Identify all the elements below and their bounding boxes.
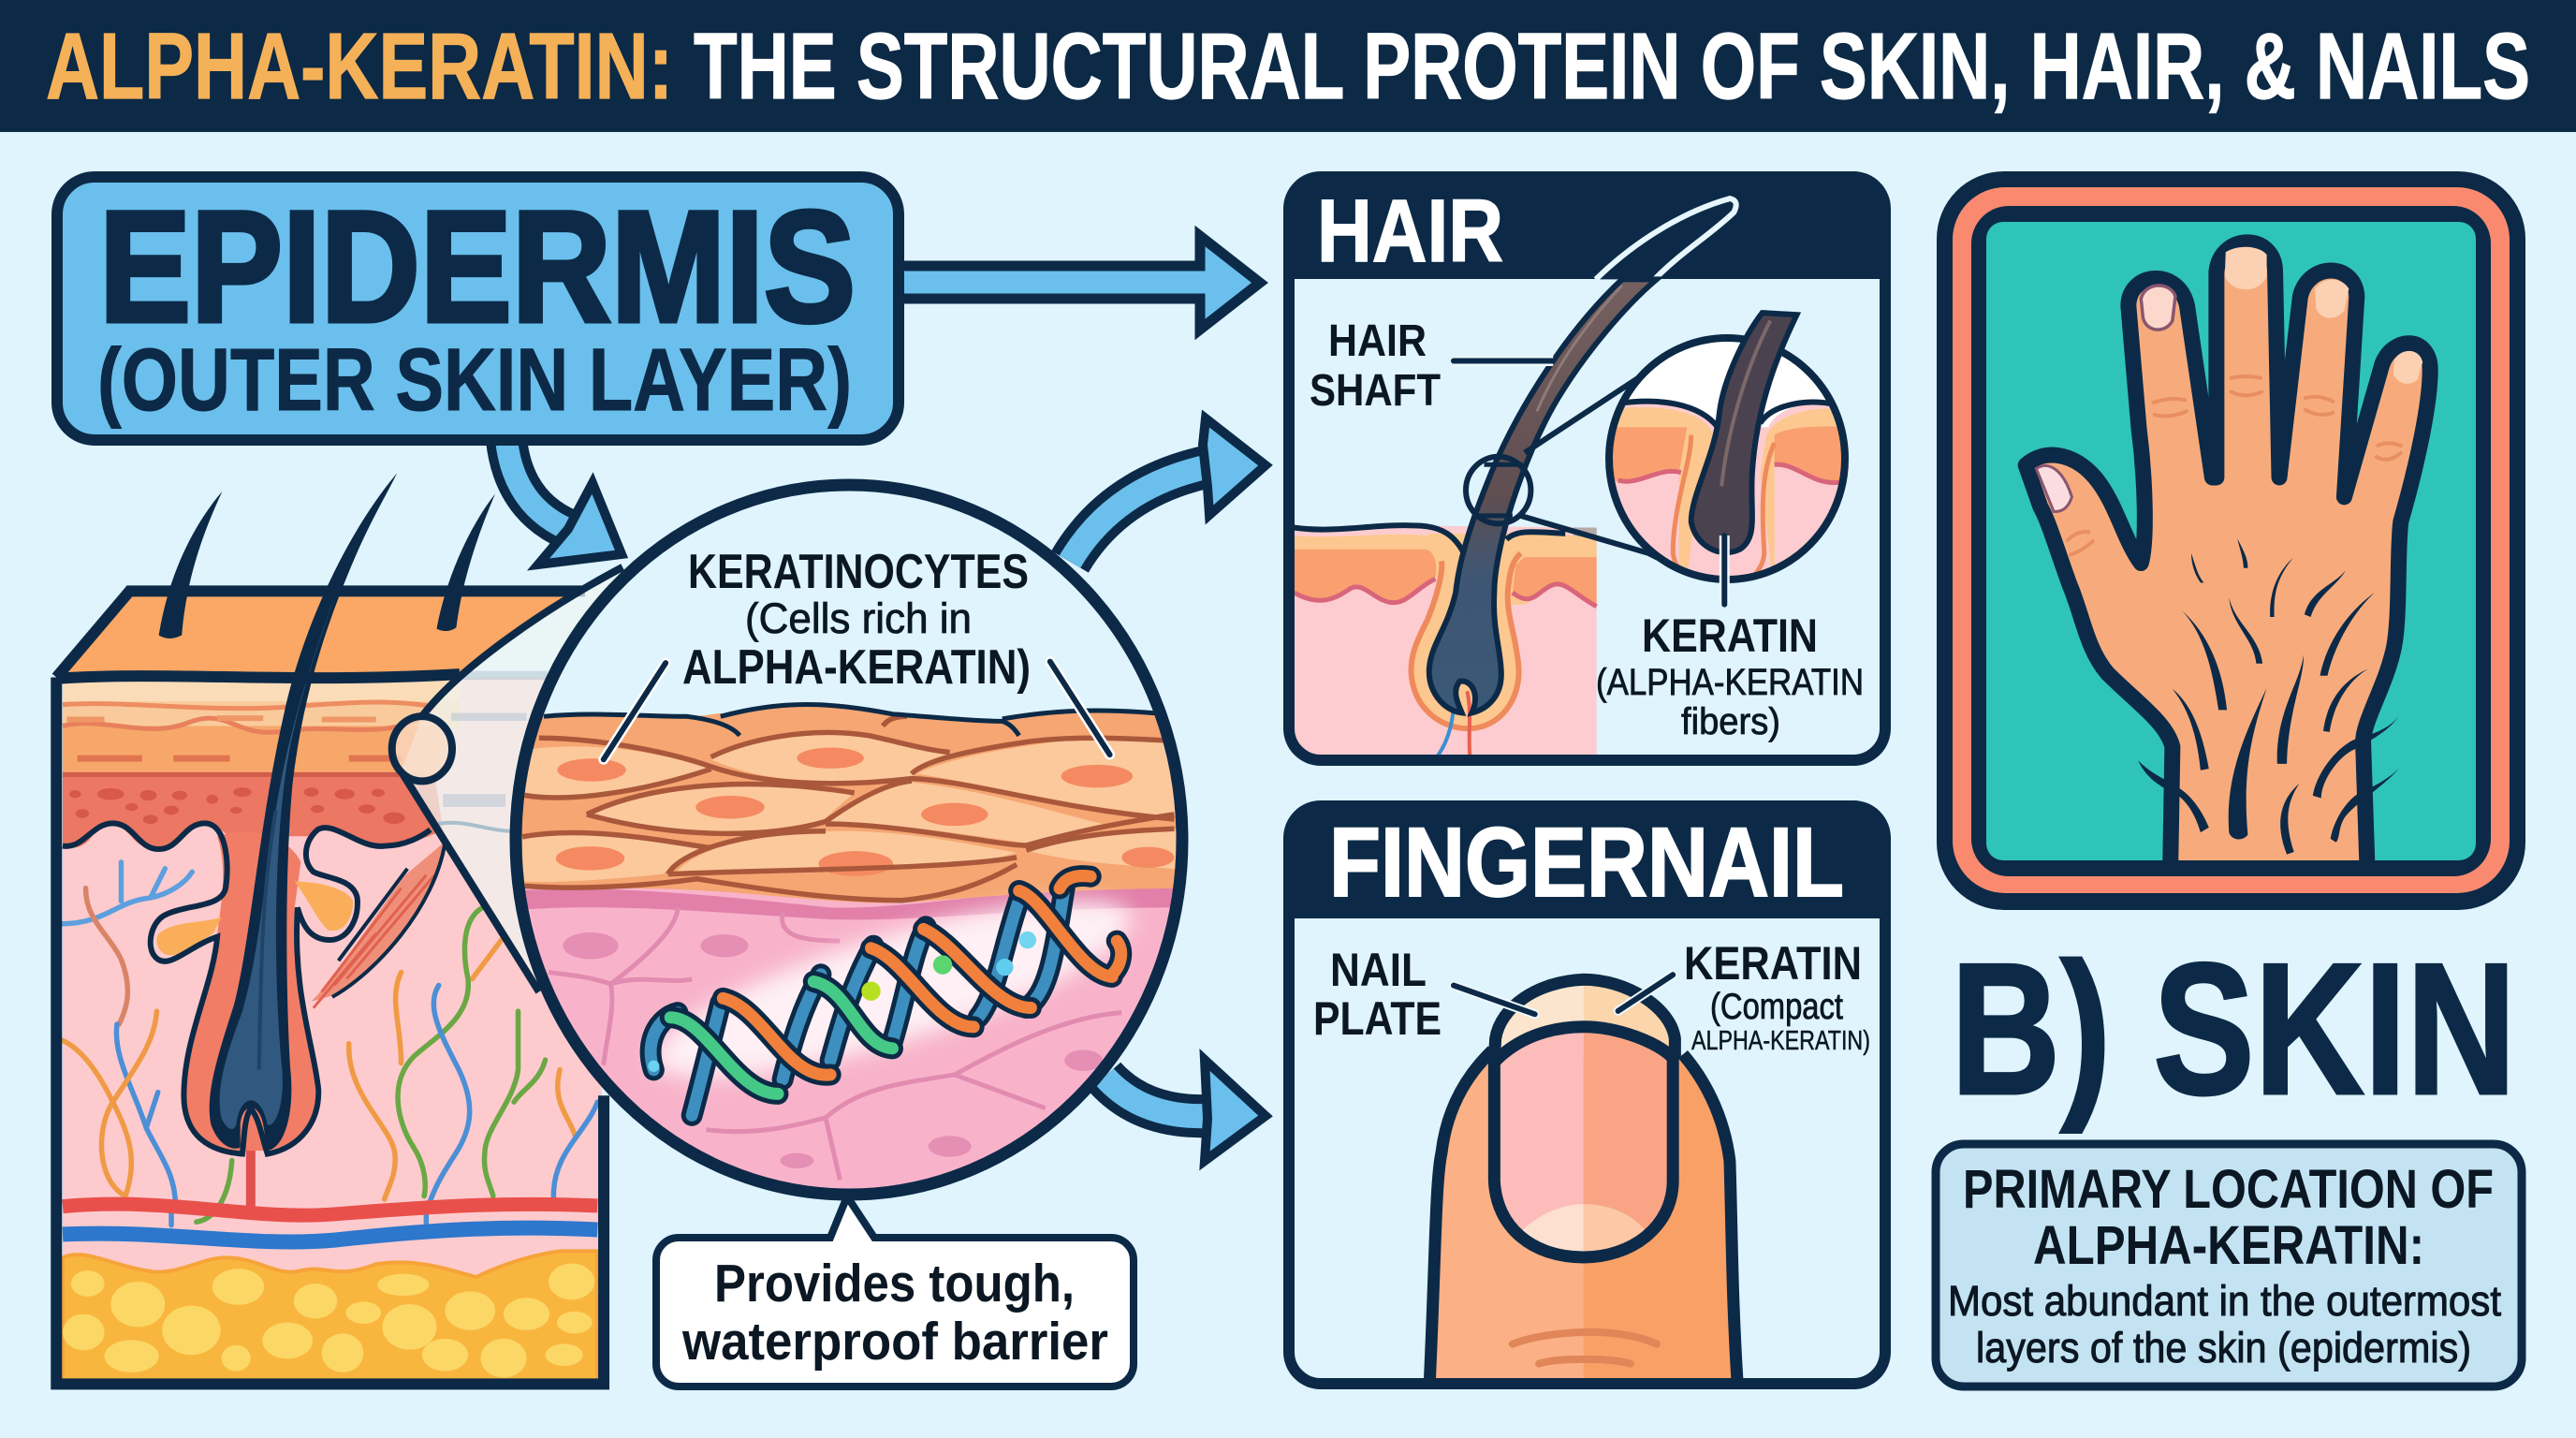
- small surface hairs: [159, 492, 495, 638]
- primary location info box: layers of the skin (epidermis): [1976, 1324, 2471, 1372]
- panel: hair: [1289, 177, 1885, 760]
- hair shaft label: HAIR: [1328, 316, 1427, 366]
- arrector muscle: [312, 843, 445, 1008]
- arrow: epidermis down to keratinocytes: [506, 440, 622, 565]
- callout: barrier: Provides tough,: [714, 1254, 1075, 1313]
- hand: [2026, 242, 2430, 869]
- epidermis label box: EPIDERMIS: [99, 178, 856, 355]
- blood vessels and nerves: [63, 862, 597, 1225]
- knuckle creases: [2068, 376, 2401, 555]
- primary location info box: ALPHA-KERATIN:: [2033, 1215, 2424, 1276]
- alpha-helix protein: [648, 876, 1121, 1115]
- keratinocytes label: KERATINOCYTES: [688, 545, 1029, 599]
- main hair: [210, 473, 397, 1151]
- nail plate label: NAIL: [1330, 944, 1427, 996]
- panel: fingernail: FINGERNAIL: [1329, 808, 1844, 917]
- nail free edge: [1494, 979, 1675, 1058]
- hair keratin label: (ALPHA-KERATIN: [1596, 662, 1864, 703]
- hair shaft label: [1310, 316, 1441, 416]
- callout: barrier: [656, 1196, 1134, 1387]
- pink dermis layer: [525, 888, 1173, 1189]
- primary location info box: [1936, 1144, 2522, 1387]
- title banner: [0, 0, 2576, 132]
- nail keratin label: (Compact: [1710, 987, 1843, 1027]
- hand hairs: [2138, 538, 2399, 855]
- nail plate label: [1313, 944, 1442, 1045]
- primary location info box: Most abundant in the outermost: [1948, 1277, 2501, 1325]
- follicle and glands: [63, 823, 431, 1154]
- fingernail header: [1289, 806, 1885, 918]
- stratified keratinocyte cells: [515, 704, 1179, 903]
- blue vein: [63, 1228, 597, 1241]
- subcutaneous fat: [63, 1251, 597, 1381]
- keratinocytes label: ALPHA-KERATIN): [682, 640, 1031, 695]
- panel: fingernail: [1289, 806, 1885, 1389]
- hair leader lines: [1454, 361, 1724, 605]
- nail keratin label: [1684, 937, 1870, 1056]
- red artery: [63, 1204, 597, 1215]
- epidermis strata: [63, 681, 460, 849]
- hair keratin label: KERATIN: [1642, 609, 1818, 662]
- hair shaft label: SHAFT: [1310, 366, 1441, 416]
- epidermis label box: (OUTER SKIN LAYER): [97, 330, 852, 430]
- block outline: [56, 591, 604, 1384]
- keratinocytes label: [682, 545, 1031, 695]
- arrow: keratinocytes to fingernail: [1105, 1060, 1266, 1161]
- hair tip over header: [1596, 198, 1736, 279]
- skin section with follicle: [1295, 525, 1597, 756]
- nail leader lines: [1454, 975, 1673, 1014]
- nail plate: [1494, 1027, 1673, 1257]
- top surface of skin block: [63, 591, 585, 678]
- title banner: ALPHA-KERATIN:: [46, 14, 673, 119]
- panel: hair: HAIR: [1317, 182, 1503, 281]
- nail plate label: PLATE: [1313, 992, 1442, 1045]
- cell leader lines: [604, 662, 1110, 759]
- hair keratin label: fibers): [1681, 701, 1780, 742]
- magnifier wedge: [392, 567, 622, 991]
- skin cross-section block: [56, 473, 622, 1384]
- nail keratin label: ALPHA-KERATIN): [1691, 1026, 1870, 1056]
- hair strand: [1429, 279, 1657, 712]
- panel: hand frame: [1937, 171, 2525, 910]
- callout: barrier: waterproof barrier: [681, 1312, 1108, 1372]
- hair panel header: [1289, 177, 1885, 279]
- fingernails: [2036, 247, 2422, 512]
- arrow: epidermis to hair: [899, 236, 1260, 330]
- white glow behind helix: [660, 887, 1138, 1088]
- magnifier lines: [1521, 378, 1728, 580]
- magnified follicle: [1606, 313, 1846, 585]
- hair keratin label: [1596, 609, 1864, 742]
- arrow: keratinocytes to hair: [1070, 418, 1266, 562]
- nail keratin label: KERATIN: [1684, 937, 1862, 990]
- finger: [1429, 1050, 1738, 1389]
- epidermis label box: [57, 177, 899, 440]
- keratinocytes label: (Cells rich in: [745, 594, 972, 642]
- keratinocytes magnified circle: [509, 479, 1189, 1200]
